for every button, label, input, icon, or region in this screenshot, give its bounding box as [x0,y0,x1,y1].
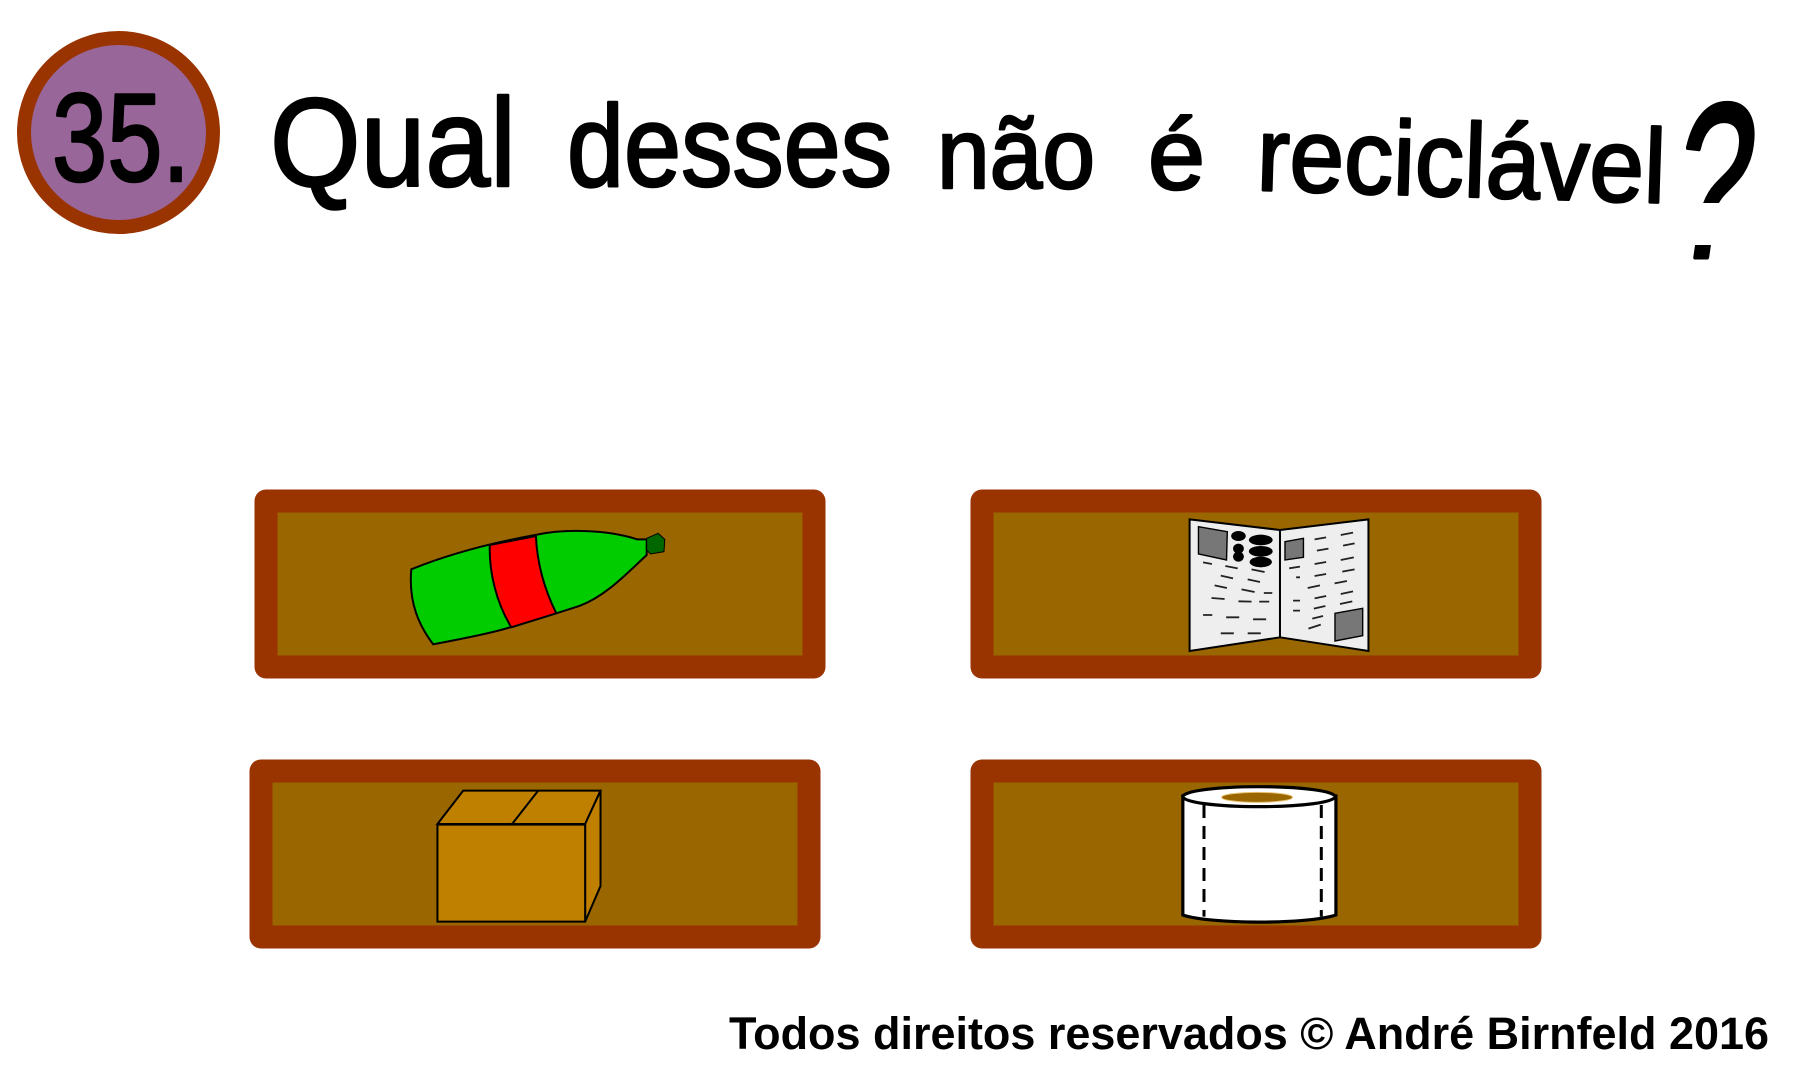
title: é [1148,99,1205,211]
title: desses [567,81,892,211]
title [270,59,1770,305]
title: reciclável [1255,96,1668,226]
title: Qual [270,74,516,213]
question number badge: 35. [52,69,190,208]
icon: cardboard box [437,791,601,922]
question number badge [24,38,213,227]
panel: toilet paper option [982,771,1530,937]
panel: cardboard box option [261,771,809,937]
icon: open newspaper [1190,519,1368,651]
title: não [937,98,1095,210]
panel: bottle option [266,501,814,667]
icon: green plastic bottle [411,531,665,644]
copyright credit: Todos direitos reservados © André Birnfeld 2016 [729,1008,1769,1059]
icon: toilet paper roll [1183,787,1336,922]
panel: newspaper option [982,501,1530,667]
title: ? [1659,59,1770,305]
